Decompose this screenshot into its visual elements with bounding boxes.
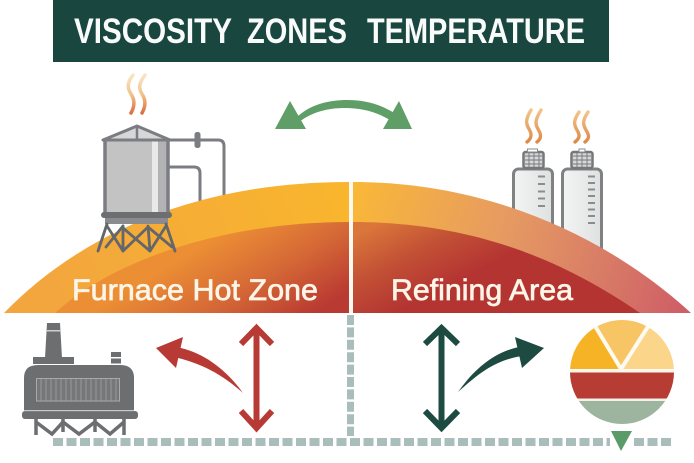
icon: red double arrow: [241, 328, 272, 428]
icon: storage tank: [98, 75, 175, 251]
title banner: [53, 0, 609, 62]
pie chart: [570, 320, 674, 424]
divider between zones: [349, 182, 353, 313]
icon: tank pipes: [168, 133, 224, 208]
icon: twin bottles with steam: [514, 110, 602, 259]
icon: furnace: [22, 323, 138, 435]
label: furnace hot zone: Furnace Hot Zone: [72, 274, 318, 307]
icon: red curved arrow: [156, 337, 243, 393]
label: refining area: Refining Area: [391, 274, 573, 307]
dashed vertical axis: [347, 315, 354, 436]
title banner: TEMPERATURE: [367, 12, 585, 51]
icon: dark green curved arrow: [458, 337, 544, 392]
icon: green pointer triangle: [611, 431, 632, 451]
title banner: VISCOSITY: [74, 12, 232, 51]
dome: refining area: [353, 182, 691, 313]
title banner: ZONES: [247, 12, 347, 51]
dashed horizontal axis: [53, 438, 671, 446]
icon: green double curved arrow: [275, 100, 412, 129]
dome: furnace hot zone: [4, 182, 349, 313]
icon: dark green double arrow: [425, 328, 458, 428]
